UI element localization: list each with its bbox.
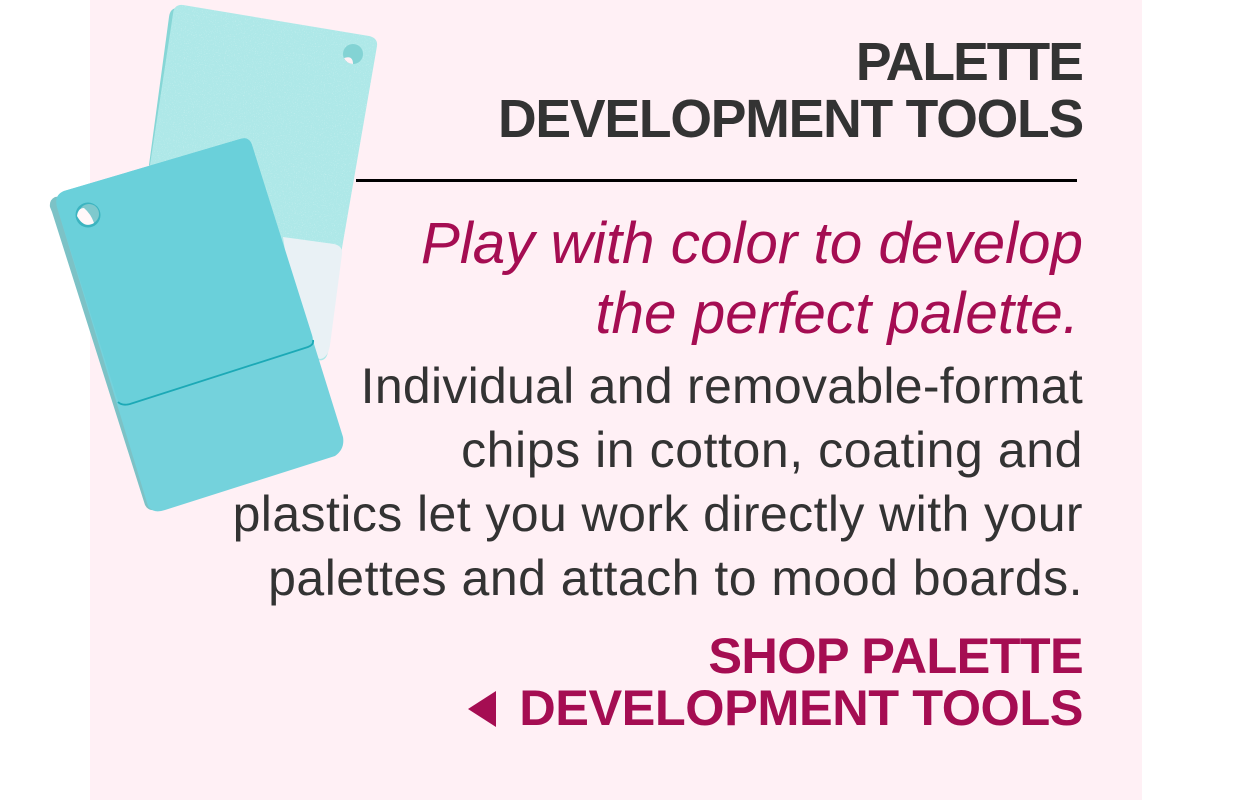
subheading bbox=[421, 211, 1083, 346]
divider rule bbox=[356, 179, 1077, 182]
subheading: the perfect palette. bbox=[595, 281, 1079, 346]
body text: palettes and attach to mood boards. bbox=[268, 550, 1083, 606]
body text: chips in cotton, coating and bbox=[461, 422, 1083, 478]
heading: PALETTE bbox=[856, 33, 1082, 92]
heading bbox=[498, 33, 1083, 149]
back chip: glitter aqua bbox=[149, 5, 377, 360]
link: shop palette development tools: DEVELOPMENT TOOLS bbox=[519, 679, 1083, 736]
body text: plastics let you work directly with your bbox=[233, 486, 1083, 542]
body text: Individual and removable-format bbox=[361, 358, 1083, 414]
link: shop palette development tools: SHOP PALETTE bbox=[708, 627, 1083, 684]
front chip: solid aqua bbox=[50, 138, 343, 511]
icon: left arrow bbox=[468, 691, 496, 727]
link: shop palette development tools bbox=[519, 627, 1083, 736]
subheading: Play with color to develop bbox=[421, 211, 1083, 276]
body text bbox=[233, 358, 1083, 606]
image: colour chips bbox=[50, 4, 378, 512]
heading: DEVELOPMENT TOOLS bbox=[498, 90, 1083, 149]
